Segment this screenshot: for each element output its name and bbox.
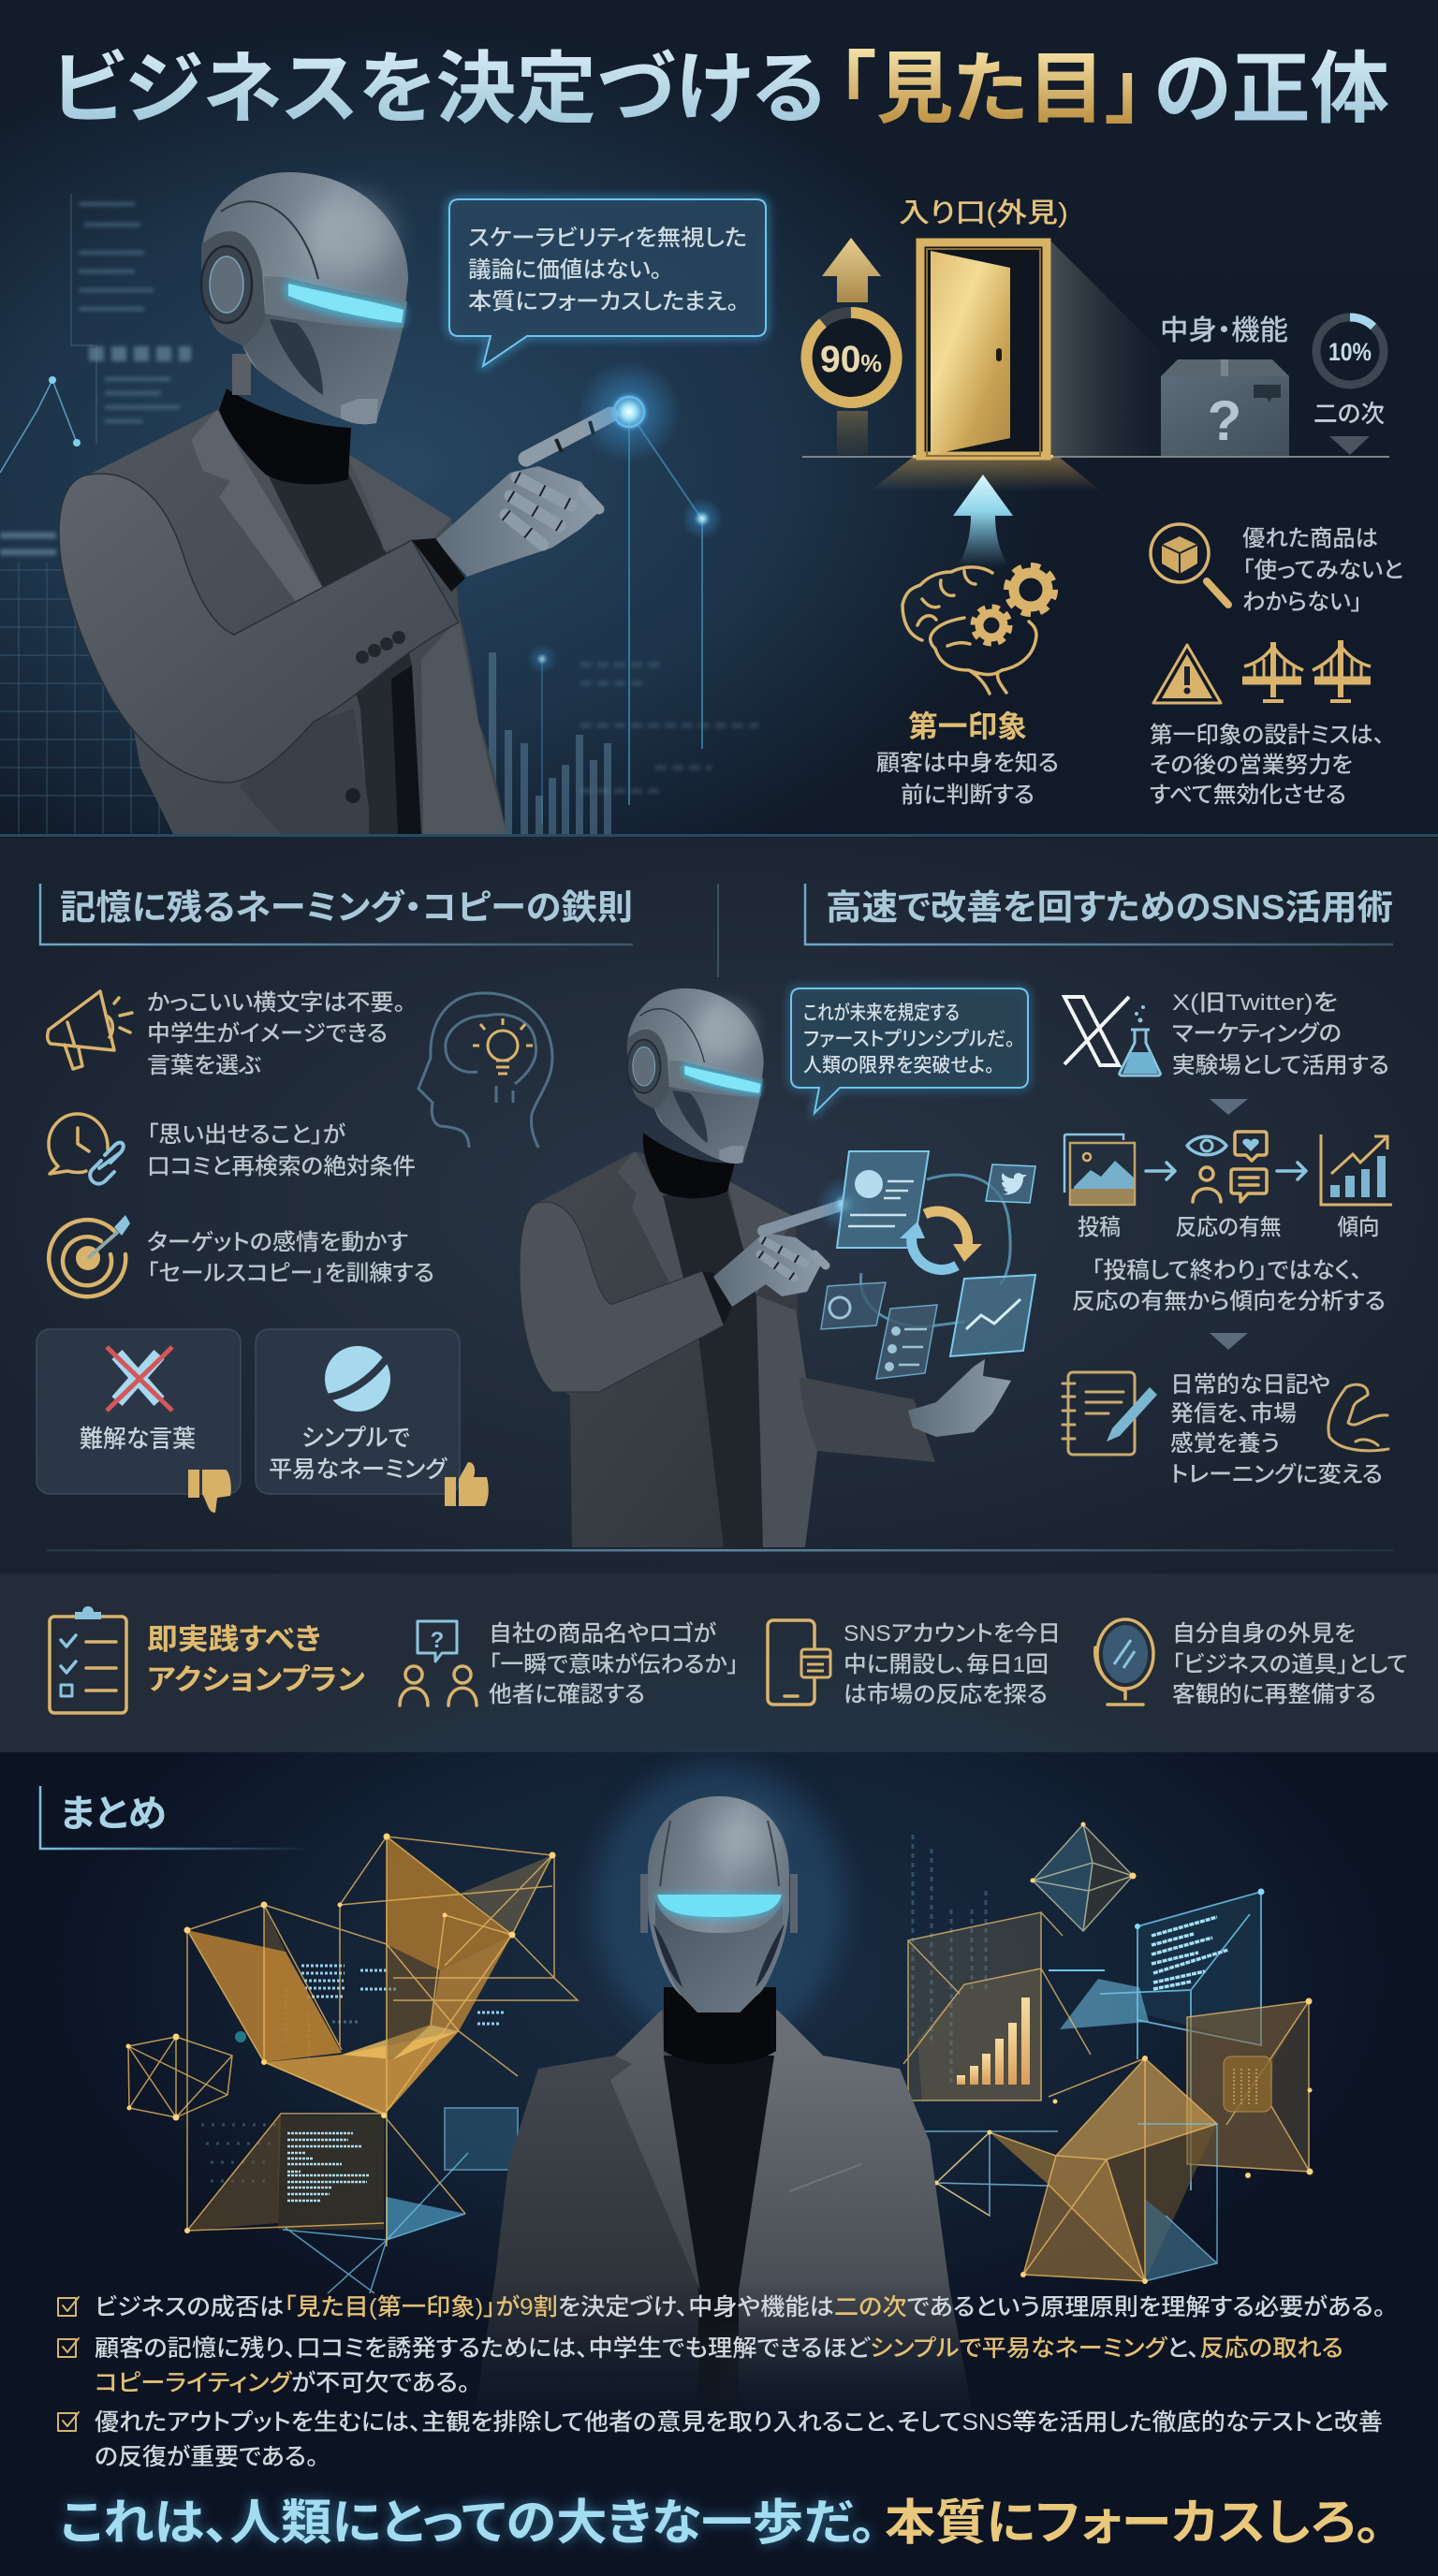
action text 1: 「一瞬で意味が伝わるか」 (489, 1652, 739, 1677)
floating SNS interface (816, 1151, 1035, 1379)
action text 1 (489, 1621, 739, 1707)
ring 10%: 10% (1328, 338, 1372, 366)
diamond (1030, 1822, 1137, 1931)
text: analyse trend: 反応の有無から傾向を分析する (1072, 1289, 1386, 1314)
action text 3 (1172, 1621, 1408, 1707)
text: first impression design: 第一印象の設計ミスは、 (1150, 723, 1385, 748)
first impression text: 前に判断する (901, 783, 1034, 808)
secondary label: 二の次 (1313, 400, 1385, 428)
icon: mirror (1095, 1619, 1153, 1705)
robot hand (435, 466, 601, 577)
icon: thumbs up (445, 1462, 489, 1506)
title: 「見た目」 (837, 45, 1144, 133)
geometric network right (903, 1822, 1313, 2284)
heading: summary (40, 1786, 312, 1849)
floor glow (870, 458, 1102, 491)
icon: broken bridge (1242, 640, 1371, 701)
text: diary training: 感覚を養う (1170, 1430, 1280, 1456)
icon: X with flask (1064, 997, 1160, 1076)
text: first impression design (1150, 723, 1385, 808)
flow labels: 反応の有無 (1176, 1215, 1281, 1240)
arrow (1146, 1163, 1175, 1179)
flow labels: 傾向 (1337, 1215, 1380, 1240)
title (51, 45, 1389, 133)
head (201, 172, 408, 424)
text: naming 3: ターゲットの感情を動かす (147, 1229, 408, 1255)
icon: muscle arm (1328, 1384, 1388, 1451)
heading: naming rules (40, 884, 633, 944)
contents label: 中身・機能 (1160, 315, 1288, 346)
panel: bird (986, 1164, 1035, 1203)
bullet 3: 優れたアウトプットを生むには、主観を排除して他者の意見を取り入れること、そしてSNS等を活用した徹底的なテストと改善 (95, 2409, 1383, 2436)
text: first impression design: すべて無効化させる (1150, 783, 1346, 808)
text: diary training (1170, 1372, 1383, 1487)
text: diary training: 発信を、市場 (1170, 1401, 1297, 1427)
head (627, 988, 764, 1164)
text: naming 1 (147, 990, 405, 1078)
action title (147, 1623, 365, 1696)
action text 2: は市場の反応を探る (844, 1682, 1048, 1707)
neck joint (232, 354, 251, 395)
flow labels: 投稿 (1078, 1215, 1121, 1240)
turtleneck (219, 388, 351, 484)
jacket (89, 410, 506, 834)
panel: list (876, 1305, 937, 1379)
glowing points and lines (578, 360, 723, 805)
gold glass panels (903, 1912, 1310, 2216)
bullet 2: コピーライティング が不可欠である。 (95, 2370, 470, 2396)
left arm (520, 1202, 727, 1392)
box: ? (1208, 389, 1241, 452)
speech bubble: scalability: スケーラビリティを無視した (468, 226, 747, 251)
text: better products: 優れた商品は (1242, 526, 1378, 551)
pointing hand (713, 1233, 824, 1307)
text: better products (1242, 526, 1403, 615)
icon: magnifier with box (1151, 524, 1228, 605)
lapels (610, 2010, 700, 2291)
action text 3: 自分自身の外見を (1172, 1621, 1356, 1647)
title: ビジネスを決定づける (51, 45, 826, 133)
right arm (800, 1377, 935, 1462)
speech bubble: scalability: 議論に価値はない。 (468, 257, 662, 283)
first impression text: 第一印象 (908, 710, 1027, 743)
text: naming 2 (147, 1122, 416, 1179)
shirt (664, 2056, 774, 2452)
robot working with SNS panels (520, 988, 1011, 1547)
data screens (201, 1966, 518, 2293)
speech bubble: first principles: これが未来を規定する (803, 1003, 960, 1024)
action title: アクションプラン (147, 1663, 365, 1696)
text: analyse trend (1072, 1258, 1386, 1314)
text: naming 2: 「思い出せること」が (147, 1122, 345, 1148)
text: first impression design: その後の営業努力を (1150, 753, 1353, 778)
first impression text: 顧客は中身を知る (876, 751, 1059, 776)
door shadow (1050, 241, 1161, 456)
shirt (663, 1192, 763, 1547)
action title: 即実践すべき (147, 1623, 321, 1656)
action plan band (50, 1606, 1408, 1713)
bullet 1: ビジネスの成否は 「見た目(第一印象)」が9割 を決定づけ、中身や機能は 二の次であるという原理原則を理解する必要がある。 (95, 2294, 1386, 2320)
icon: cycle arrows (900, 1211, 982, 1269)
cyan up arrow (953, 475, 1013, 566)
robot standing front (475, 1764, 973, 2471)
text: diary training: 日常的な日記や (1170, 1372, 1330, 1398)
closing statement: 本質にフォーカスしろ。 (885, 2496, 1381, 2551)
icon: target (49, 1215, 130, 1296)
icon: megaphone (48, 991, 132, 1069)
text: naming 2: 口コミと再検索の絶対条件 (147, 1154, 416, 1179)
text: X as lab: 実験場として活用する (1172, 1053, 1389, 1078)
bullet 2 (58, 2335, 1343, 2396)
sleeve (59, 474, 459, 783)
heading: SNS (805, 884, 1393, 944)
floor line (802, 456, 1389, 458)
flow: post response trend (1064, 1132, 1392, 1240)
icon: warning (1153, 645, 1221, 703)
speech bubble: first principles (791, 988, 1028, 1113)
up arrow 90 (837, 411, 868, 455)
panel: chart (950, 1275, 1035, 1356)
text: X as lab: X(旧Twitter)を (1172, 990, 1338, 1016)
icon: brain with gears (902, 566, 1054, 694)
background chart decoration (0, 194, 758, 834)
gold star shape (934, 1998, 1313, 2284)
text: better products: 「使ってみないと (1242, 558, 1403, 583)
heading: naming rules: 記憶に残るネーミング・コピーの鉄則 (60, 888, 633, 927)
lapels and panels (727, 1180, 817, 1547)
door (920, 242, 1047, 456)
action text 1: 他者に確認する (489, 1682, 645, 1707)
geometric network left (125, 1833, 578, 2293)
icon: reactions (1187, 1132, 1267, 1202)
closing statement: これは、人類にとっての大きな一歩だ。 (60, 2496, 876, 2551)
head (640, 1796, 798, 2012)
card: simple naming: 平易なネーミング (269, 1456, 448, 1483)
icon: people question: ? (431, 1628, 444, 1653)
box (1161, 359, 1289, 456)
action text 2: SNSアカウントを今日 (844, 1621, 1061, 1647)
flow labels (1078, 1215, 1380, 1240)
robot presenter pointing (59, 172, 610, 834)
first impression text (876, 710, 1059, 808)
action text 2 (844, 1621, 1061, 1707)
shirt (267, 473, 416, 834)
text: naming 3 (147, 1229, 434, 1286)
entrance label: 入り口(外見) (899, 198, 1068, 228)
panel: gauge (821, 1282, 886, 1329)
card: difficult words: 難解な言葉 (80, 1425, 196, 1453)
icon: notebook and pen (1063, 1372, 1157, 1455)
jacket right (721, 2010, 973, 2471)
text: X as lab (1172, 990, 1389, 1078)
heading: SNS: 高速で改善を回すためのSNS活用術 (826, 888, 1393, 927)
cyan panel (1049, 1889, 1264, 2190)
icon: clipboard (50, 1606, 126, 1713)
icon: clock and chain (49, 1114, 124, 1184)
panel: profile (837, 1151, 929, 1248)
card: difficult words (37, 1329, 241, 1513)
closing statement: これは、人類にとっての大きな一歩だ。 (60, 2496, 876, 2551)
action text 3: 「ビジネスの道具」として (1172, 1652, 1408, 1677)
text: analyse trend: 「投稿して終わり」ではなく、 (1092, 1258, 1362, 1283)
bullet 2: 顧客の記憶に残り、口コミを誘発するためには、中学生でも理解できるほど シンプルで平易なネーミング と、反応の取れる (95, 2335, 1343, 2362)
action text 1: 自社の商品名やロゴが (489, 1621, 716, 1647)
jacket (520, 1151, 817, 1547)
jacket left (475, 2010, 721, 2471)
card: simple naming (256, 1329, 489, 1506)
icon: head with light bulb (418, 993, 552, 1148)
icon: crossed chevrons (107, 1347, 172, 1411)
icon: thumbs down (188, 1470, 231, 1513)
code columns (913, 1835, 986, 2087)
title: の正体 (1153, 45, 1389, 133)
text: naming 1: 言葉を選ぶ (147, 1053, 261, 1078)
open hand (908, 1359, 1011, 1437)
text: naming 1: かっこいい横文字は不要。 (147, 990, 405, 1016)
arrow (1277, 1163, 1306, 1179)
action text 2: 中に開設し、毎日1回 (844, 1652, 1049, 1677)
bullet 3: の反復が重要である。 (95, 2444, 318, 2470)
text: naming 1: 中学生がイメージできる (147, 1021, 388, 1046)
door diagram (802, 198, 1389, 491)
turtleneck (664, 1987, 776, 2064)
heading: summary: まとめ (60, 1793, 167, 1835)
summary bullets (58, 2294, 1386, 2470)
icon: people question (400, 1621, 477, 1705)
turtleneck (643, 1133, 735, 1198)
sleeve buttons (356, 631, 405, 664)
text: X as lab: マーケティングの (1172, 1021, 1342, 1046)
icon: image post (1064, 1134, 1135, 1205)
speech bubble: first principles: ファーストプリンシプルだ。 (803, 1029, 1015, 1050)
text: better products: わからない」 (1242, 590, 1362, 615)
action text 3: 客観的に再整備する (1172, 1682, 1376, 1707)
icon: phone and calendar (768, 1620, 830, 1705)
card: simple naming: シンプルで (301, 1424, 410, 1452)
speech bubble: first principles: 人類の限界を突破せよ。 (803, 1055, 994, 1076)
ring 90%: 90% (820, 339, 882, 380)
text: naming 3: 「セールスコピー」を訓練する (147, 1261, 434, 1286)
speech bubble: scalability: 本質にフォーカスしたまえ。 (468, 289, 739, 315)
right jacket panel (346, 453, 506, 834)
speech bubble: scalability (449, 199, 766, 366)
bar chart (957, 1998, 1030, 2085)
icon: trend chart (1321, 1134, 1392, 1205)
ring 90% (806, 313, 897, 402)
ring 10% (1316, 317, 1384, 385)
text: diary training: トレーニングに変える (1170, 1462, 1383, 1487)
bullet 3 (58, 2409, 1383, 2470)
icon: simple circle (325, 1346, 390, 1412)
closing statement (60, 2496, 1381, 2551)
lapel (191, 410, 325, 609)
